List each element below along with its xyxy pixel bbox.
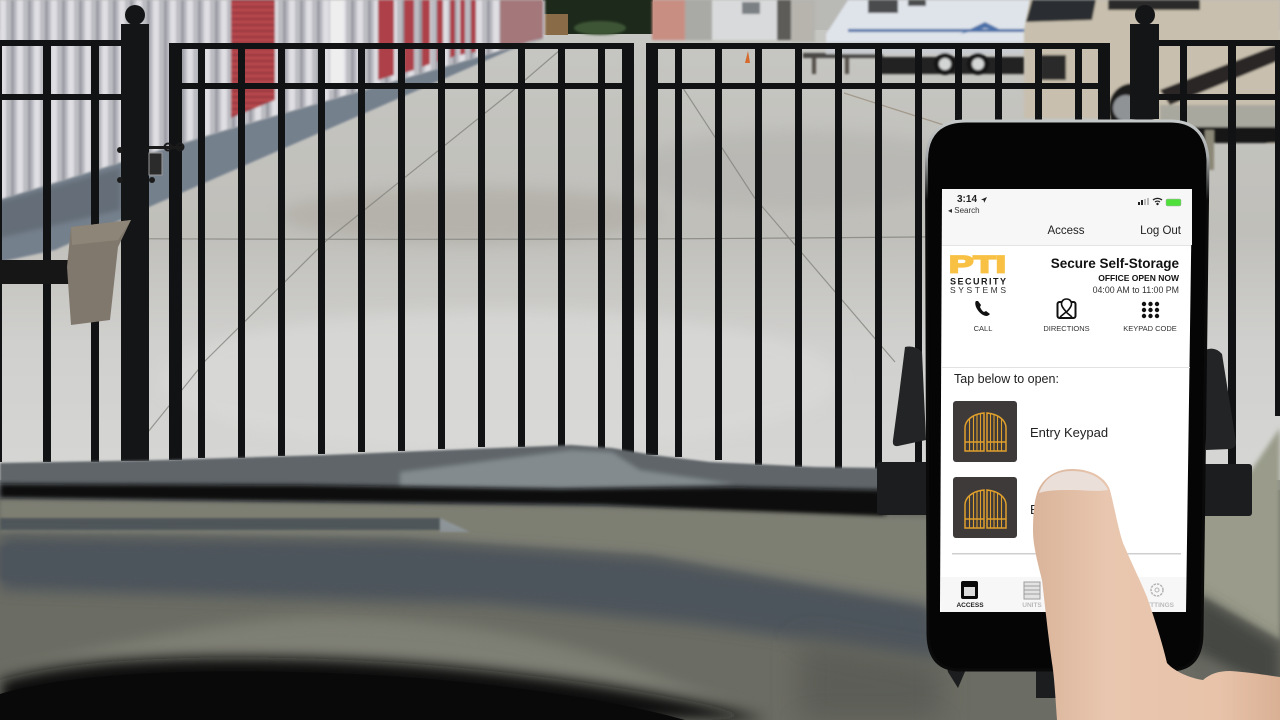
dashboard top reflection: [0, 445, 885, 510]
defrost vent: [0, 518, 470, 532]
right clamp arm: [1205, 349, 1236, 450]
instrument hood: [0, 617, 768, 720]
PTI Security Systems logo: SECURITY: [950, 276, 1006, 286]
tab: access: ACCESS: [956, 602, 984, 609]
tab: units: [1022, 582, 1042, 609]
PTI Security Systems logo: SYSTEMS: [950, 285, 1006, 295]
pointing finger: [1033, 469, 1280, 720]
facility name and hours: 04:00 AM to 11:00 PM: [1093, 285, 1179, 295]
button: entry keypad: [953, 401, 1108, 462]
button: exit keypad: E: [1030, 502, 1039, 517]
icon: directions: [1043, 299, 1090, 333]
app header bar: Access: [1047, 225, 1085, 237]
tab: settings: SETTINGS: [1141, 602, 1175, 609]
sliding gate leaf: right: [646, 43, 1110, 469]
button: exit keypad: [953, 477, 1039, 538]
icon: call: CALL: [974, 324, 992, 333]
beige motorhome: [1024, 0, 1280, 170]
left clamp arm: [893, 347, 926, 446]
mount base bars: [877, 462, 937, 515]
left storage building: [0, 0, 545, 200]
passenger side panel: [1195, 428, 1280, 640]
olive upper dash: [0, 500, 930, 610]
icon: keypad code: [1123, 302, 1177, 333]
lower dash near phone: [800, 640, 940, 720]
right storage building: [652, 0, 815, 42]
app header bar: 3:14: [957, 194, 977, 205]
white travel trailer: [803, 0, 1030, 75]
shadow on the driveway: [0, 38, 545, 262]
button: entry keypad: Entry Keypad: [1030, 425, 1108, 440]
blue grey dash panel: [0, 536, 940, 660]
icon: keypad code: KEYPAD CODE: [1123, 324, 1177, 333]
tab: settings: [1141, 584, 1175, 609]
lower prongs: [945, 660, 970, 688]
tab: units: UNITS: [1022, 602, 1042, 609]
fingernail: [1039, 471, 1108, 493]
tap prompt: Tap below to open:: [954, 372, 1059, 386]
PTI Security Systems logo: [949, 252, 1006, 295]
app header bar: Log Out: [1140, 225, 1182, 237]
smartphone: [926, 121, 1208, 670]
status icons: [1138, 198, 1181, 206]
steering wheel: [0, 657, 768, 720]
app header bar: ◂ Search: [948, 206, 980, 215]
dashboard base: [0, 490, 1280, 720]
sky and distant backdrop: [0, 0, 1280, 40]
phone mount: [877, 347, 1252, 698]
right fence panel: [1158, 40, 1280, 466]
icon: call: [974, 301, 992, 333]
dark windshield shadow band: [0, 484, 885, 518]
left gate post with ball cap: [121, 5, 149, 461]
sliding gate leaf: left: [169, 43, 634, 460]
phone screen: [940, 189, 1192, 612]
right gate post with ball cap: [1130, 5, 1159, 119]
concrete driveway: [0, 30, 1280, 480]
concrete joints: [0, 50, 1000, 432]
left fence panel: [0, 40, 122, 462]
orange traffic cone: [745, 51, 750, 63]
trees at end of the lane: [543, 0, 653, 35]
PTI Security Systems logo: PTI: [949, 252, 1006, 278]
tab: access: [956, 581, 984, 609]
facility name and hours: OFFICE OPEN NOW: [1098, 273, 1180, 283]
facility name and hours: [1051, 256, 1180, 295]
icon: directions: DIRECTIONS: [1043, 324, 1090, 333]
gate access keypad on post: [0, 220, 131, 325]
gate latch: [117, 144, 184, 183]
bottom tab bar: [941, 577, 1186, 612]
background: storage facility scene: [0, 0, 1280, 480]
app header bar: [942, 189, 1192, 246]
car dashboard: [0, 428, 1280, 720]
facility name and hours: Secure Self-Storage: [1051, 256, 1179, 271]
